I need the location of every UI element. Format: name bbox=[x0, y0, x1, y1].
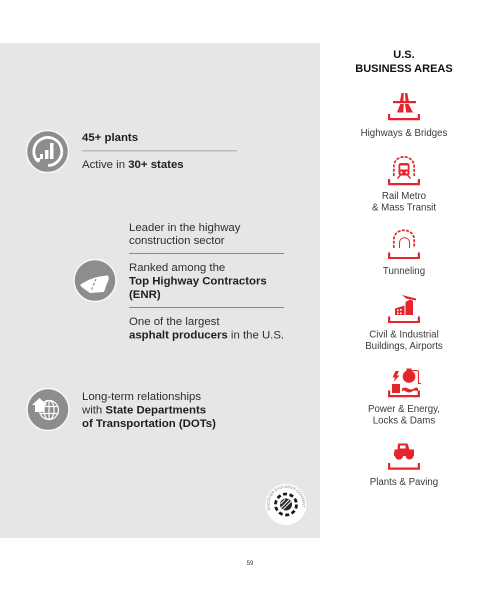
label: Buildings, Airports bbox=[365, 341, 443, 352]
icon: highway in circle bbox=[74, 260, 116, 302]
stat block: DOT relationships bbox=[27, 388, 216, 430]
icon: tunnel bbox=[388, 230, 420, 259]
badge: discover exclusive content: DISCOVER EXCLUSIVE CONTENT bbox=[267, 485, 306, 510]
text: largest asphalt producers: asphalt producers bbox=[129, 330, 228, 342]
heading: U.S. business areas: BUSINESS AREAS bbox=[355, 63, 453, 75]
label: Highways & Bridges bbox=[361, 128, 447, 139]
text: largest asphalt producers: One of the largest bbox=[129, 316, 220, 328]
icon: highway bbox=[388, 93, 420, 120]
text: ranked among top contractors: (ENR) bbox=[129, 289, 161, 301]
heading: U.S. business areas: U.S. bbox=[393, 49, 415, 61]
text: state departments of transportation: State Departments bbox=[105, 404, 206, 416]
text: leader in the highway sector: construction sector bbox=[129, 235, 225, 247]
label: Civil & Industrial bbox=[369, 330, 439, 340]
text: state departments of transportation: of Transportation (DOTs) bbox=[82, 418, 216, 430]
text: 45+ plants: 45+ plants bbox=[82, 132, 138, 144]
text: active in 30+ states: Active in 30+ states bbox=[82, 159, 184, 171]
text: state departments of transportation: Long-term relationships bbox=[82, 391, 201, 403]
text: state departments of transportation: with bbox=[81, 404, 105, 416]
item: rail metro and mass transit bbox=[372, 157, 436, 214]
text: ranked among top contractors: Ranked among the bbox=[129, 262, 225, 274]
item: power, energy, locks and dams bbox=[368, 368, 440, 426]
page number: 59 bbox=[247, 561, 254, 567]
label: Plants & Paving bbox=[370, 477, 438, 488]
text: ranked among top contractors: Top Highway Contractors bbox=[129, 276, 267, 288]
icon: tractor bbox=[388, 444, 420, 470]
item: plants and paving bbox=[370, 444, 438, 488]
label: & Mass Transit bbox=[372, 202, 436, 214]
text: leader in the highway sector: Leader in the highway bbox=[129, 222, 240, 234]
panel: grey background bbox=[0, 43, 320, 538]
stat block: plants and states bbox=[26, 130, 237, 172]
icon: globe and house in circle bbox=[27, 388, 69, 430]
label: Rail Metro bbox=[382, 191, 426, 202]
label: Power & Energy, bbox=[368, 404, 440, 415]
badge: discover exclusive content bbox=[266, 484, 306, 525]
item: highways and bridges bbox=[361, 93, 447, 139]
label: Locks & Dams bbox=[373, 416, 435, 426]
icon: power plant and dam bbox=[388, 368, 421, 397]
item: tunneling bbox=[383, 230, 425, 277]
icon: buildings and plane bbox=[388, 295, 420, 323]
text: largest asphalt producers: in the U.S. bbox=[228, 330, 284, 342]
label: Tunneling bbox=[383, 266, 425, 277]
icon: bar chart in circle bbox=[26, 130, 68, 172]
icon: train in tunnel bbox=[388, 157, 420, 185]
item: civil and industrial buildings, airports bbox=[365, 295, 443, 352]
stat block: highway leadership bbox=[74, 222, 284, 342]
